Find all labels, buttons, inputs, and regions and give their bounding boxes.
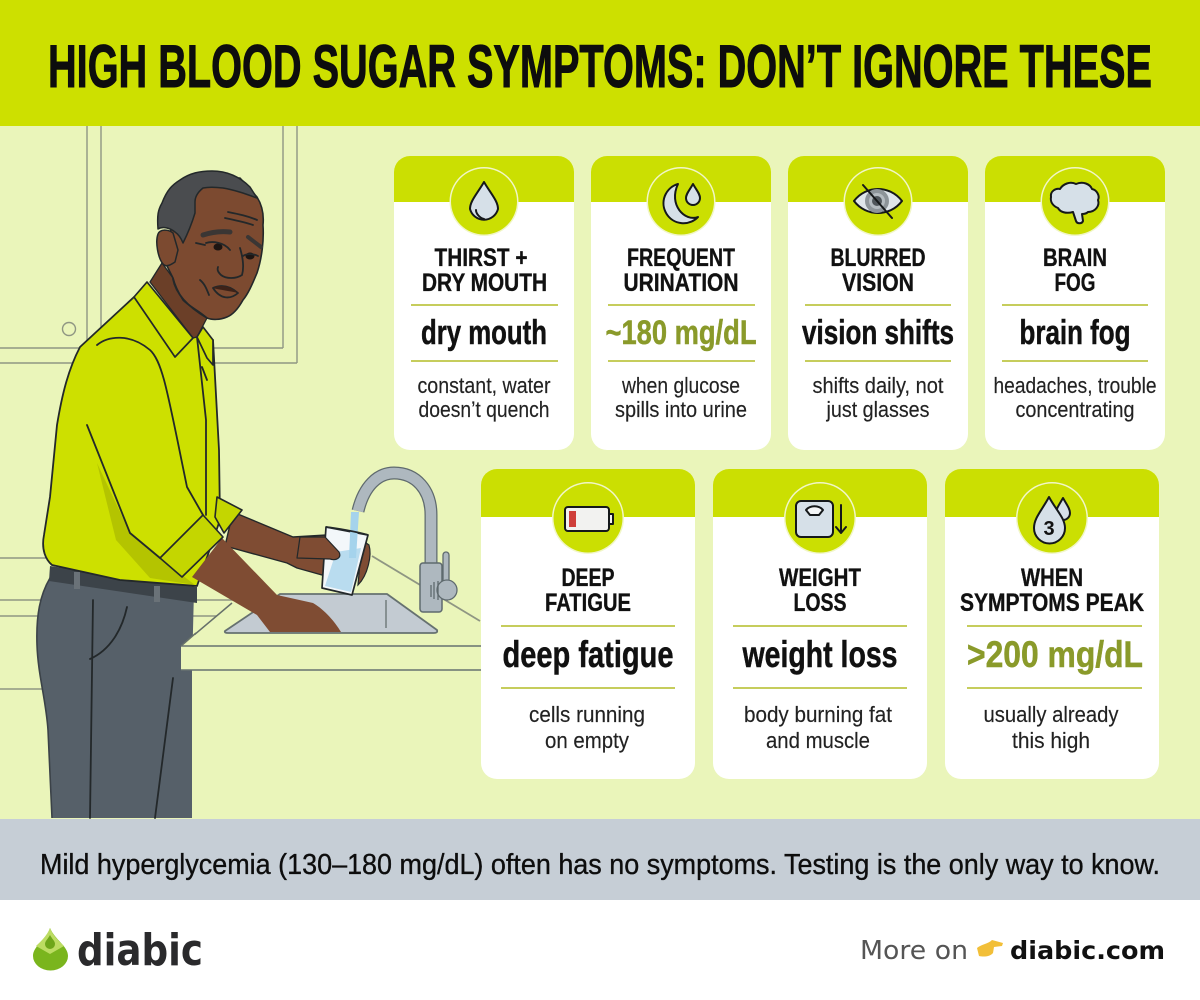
- panel: when symptoms peak: this high: [1012, 728, 1090, 753]
- shirt cuffs: [160, 497, 242, 577]
- footer: [0, 900, 1200, 1000]
- panel: when symptoms peak: usually already: [984, 702, 1118, 727]
- icon: water drop: [470, 182, 498, 220]
- link: more on diabic.com: diabic.com: [1010, 936, 1165, 965]
- sink: [225, 594, 437, 633]
- link: more on diabic.com: [860, 936, 1165, 966]
- near arm: [192, 538, 341, 632]
- panel: blurred vision: just glasses: [826, 397, 930, 422]
- panel: weight loss: WEIGHT: [779, 564, 861, 592]
- panel: deep fatigue: [481, 469, 695, 779]
- panel: when symptoms peak: >200 mg/dL: [967, 634, 1143, 675]
- panel: deep fatigue: on empty: [545, 728, 629, 753]
- panel: thirst + dry mouth: constant, water: [418, 373, 550, 398]
- header band: [0, 0, 1200, 126]
- shirt collar: [134, 282, 213, 365]
- kitchen background illustration: [0, 126, 1200, 689]
- far arm and hand: [225, 512, 342, 575]
- panel: weight loss: weight loss: [742, 634, 898, 675]
- panel: frequent urination: spills into urine: [615, 397, 747, 422]
- panel: brain fog: headaches, trouble: [994, 373, 1156, 398]
- panel: when symptoms peak: SYMPTOMS PEAK: [960, 589, 1144, 617]
- panel: weight loss: [713, 469, 927, 779]
- page background: [0, 126, 1200, 820]
- icon: low battery: [565, 507, 613, 531]
- panel: deep fatigue: DEEP: [562, 564, 614, 592]
- panel: deep fatigue: FATIGUE: [545, 589, 631, 617]
- panel: thirst + dry mouth: THIRST +: [434, 244, 528, 272]
- water glass with water stream: [297, 512, 370, 595]
- icon: pointing hand: [977, 940, 1003, 957]
- panel: thirst + dry mouth: [394, 156, 574, 450]
- panel: blurred vision: shifts daily, not: [812, 373, 944, 398]
- icon: scale with down arrow: [796, 501, 846, 537]
- head: [157, 171, 263, 319]
- panel: when symptoms peak: WHEN: [1021, 564, 1083, 592]
- panel: blurred vision: VISION: [842, 269, 914, 297]
- icon: glucose drops: 3: [1043, 518, 1055, 540]
- icon: brain: [1051, 183, 1099, 223]
- icon: blurred eye: [854, 185, 902, 218]
- panel: weight loss: and muscle: [766, 728, 870, 753]
- icon: moon and drop: [663, 184, 700, 223]
- panel: weight loss: body burning fat: [744, 702, 892, 727]
- panel: deep fatigue: cells running: [529, 702, 645, 727]
- shirt body: [43, 297, 220, 586]
- panel: frequent urination: URINATION: [624, 269, 738, 297]
- panel: frequent urination: [591, 156, 771, 450]
- panel: frequent urination: when glucose: [621, 373, 740, 398]
- panel: thirst + dry mouth: dry mouth: [421, 314, 547, 352]
- man: [37, 171, 342, 818]
- panel: weight loss: LOSS: [794, 589, 846, 617]
- panel: deep fatigue: deep fatigue: [502, 634, 674, 675]
- bottom callout band: [0, 819, 1200, 900]
- panel: brain fog: BRAIN: [1043, 244, 1107, 272]
- panel: thirst + dry mouth: DRY MOUTH: [422, 269, 547, 297]
- panel: brain fog: concentrating: [1016, 397, 1134, 422]
- shirt shadow: [97, 463, 195, 585]
- link: more on diabic.com: More on: [860, 936, 968, 966]
- panel: brain fog: [985, 156, 1165, 450]
- panel: blurred vision: BLURRED: [830, 244, 926, 272]
- panel: brain fog: brain fog: [1020, 314, 1130, 352]
- logo: diabic: [33, 925, 203, 976]
- panel: brain fog: FOG: [1054, 269, 1096, 297]
- shirt fold lines: [87, 337, 207, 558]
- faucet: [358, 473, 457, 612]
- counter front edge: [181, 633, 481, 670]
- panel: blurred vision: vision shifts: [802, 314, 954, 352]
- panel: thirst + dry mouth: doesn’t quench: [418, 397, 550, 422]
- belt: [49, 566, 197, 603]
- trousers: [37, 578, 194, 818]
- logo: diabic: diabic: [77, 925, 203, 976]
- neck: [150, 263, 207, 338]
- panel: when symptoms peak: [945, 469, 1159, 779]
- panel: frequent urination: ~180 mg/dL: [606, 314, 756, 352]
- panel: frequent urination: FREQUENT: [627, 244, 735, 272]
- icon: glucose drops: [1034, 497, 1070, 544]
- panel: blurred vision: [788, 156, 968, 450]
